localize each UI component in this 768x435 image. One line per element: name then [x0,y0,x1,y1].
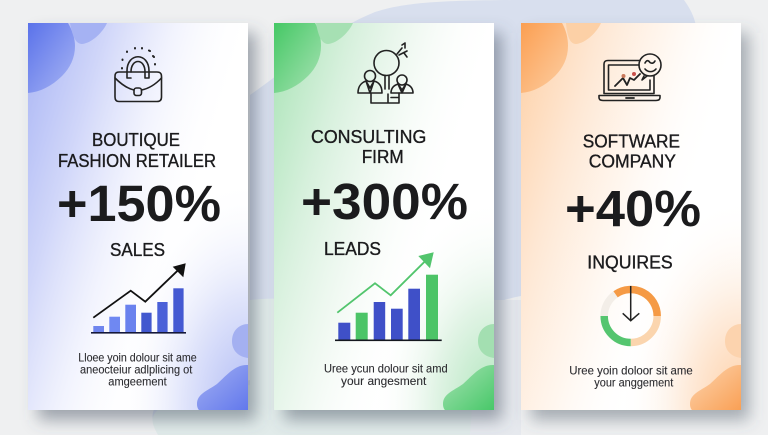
label: sales: SALES [110,240,165,260]
icon: handbag [115,48,162,102]
heading: software company: SOFTWARE [583,131,680,151]
icon: consultants [358,43,413,103]
metric: +150%: +150% [57,175,221,232]
metric: +40%: +40% [565,180,701,237]
label: leads: LEADS [324,239,381,259]
bar chart: sales [91,263,186,334]
bar chart: leads [335,252,442,341]
heading: software company: COMPANY [589,152,676,172]
heading: consulting firm: CONSULTING [311,127,426,147]
heading: consulting firm: FIRM [362,147,404,167]
metric: +300%: +300% [301,173,468,230]
heading: boutique fashion retailer: BOUTIQUE [92,130,180,150]
heading: boutique fashion retailer [58,130,216,171]
description [324,362,448,388]
heading: software company [583,131,680,172]
description [78,351,197,388]
description: Uree yoin doloor sit ame [569,363,693,377]
panel: boutique fashion retailer [28,23,256,420]
description: aneocteiur adlplicing ot [80,362,193,376]
description: your angesment [341,374,427,388]
donut chart with arrow [604,286,657,342]
description: Uree ycun dolour sit amd [324,362,448,376]
description: your anggement [594,376,674,390]
description: amgeement [108,374,167,388]
description: Lloee yoin dolour sit ame [78,351,197,365]
heading: consulting firm [311,127,426,167]
heading: boutique fashion retailer: FASHION RETAILER [58,151,216,171]
description [569,363,693,390]
label: inquires: INQUIRES [587,252,673,272]
panel: software company [521,23,749,420]
panel: consulting firm [274,23,502,420]
icon: laptop with smiley [599,54,661,100]
